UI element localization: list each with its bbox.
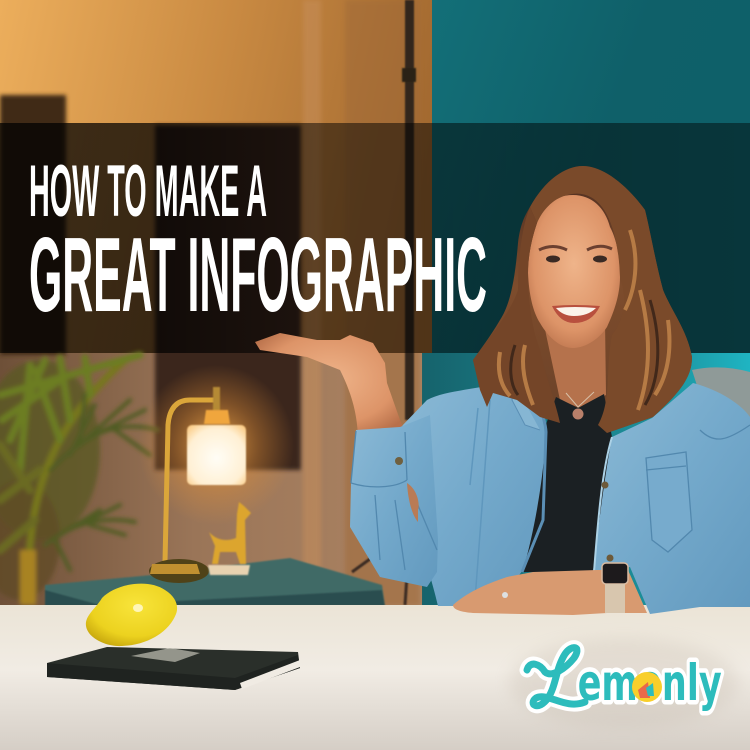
eyebrows, eyes, nose and smile — [539, 246, 612, 250]
Lemonly logo: emonly — [578, 655, 722, 713]
ring — [502, 592, 508, 598]
collar and placket — [512, 374, 546, 572]
logo swash — [527, 648, 585, 706]
neck — [543, 320, 606, 408]
side table — [45, 558, 385, 606]
title: HOW TO MAKE A — [29, 151, 267, 232]
denim shirt body — [400, 377, 546, 606]
plant — [0, 355, 158, 605]
necklace — [566, 392, 594, 407]
logo swash foreground — [527, 648, 585, 706]
hair strands over face — [530, 166, 692, 433]
lamp glow — [138, 365, 294, 525]
Lemonly logo: L — [542, 699, 543, 701]
Lemonly logo — [509, 638, 739, 728]
hair back — [473, 166, 692, 433]
lemon wedge icon — [632, 672, 662, 702]
yellow lemon — [86, 584, 177, 646]
chair — [692, 367, 750, 425]
black notebook — [47, 647, 300, 690]
title — [29, 151, 487, 334]
dark title band — [0, 123, 750, 353]
desk lamp — [149, 387, 246, 583]
shirt pocket — [646, 452, 692, 552]
face — [528, 195, 620, 348]
table top — [0, 605, 750, 750]
black tee — [522, 394, 612, 572]
smart watch — [602, 563, 628, 613]
sleeve — [350, 415, 438, 587]
person — [255, 166, 750, 615]
hand on table — [453, 570, 647, 615]
llama figurine — [208, 502, 251, 575]
forearm and hand — [255, 333, 405, 436]
